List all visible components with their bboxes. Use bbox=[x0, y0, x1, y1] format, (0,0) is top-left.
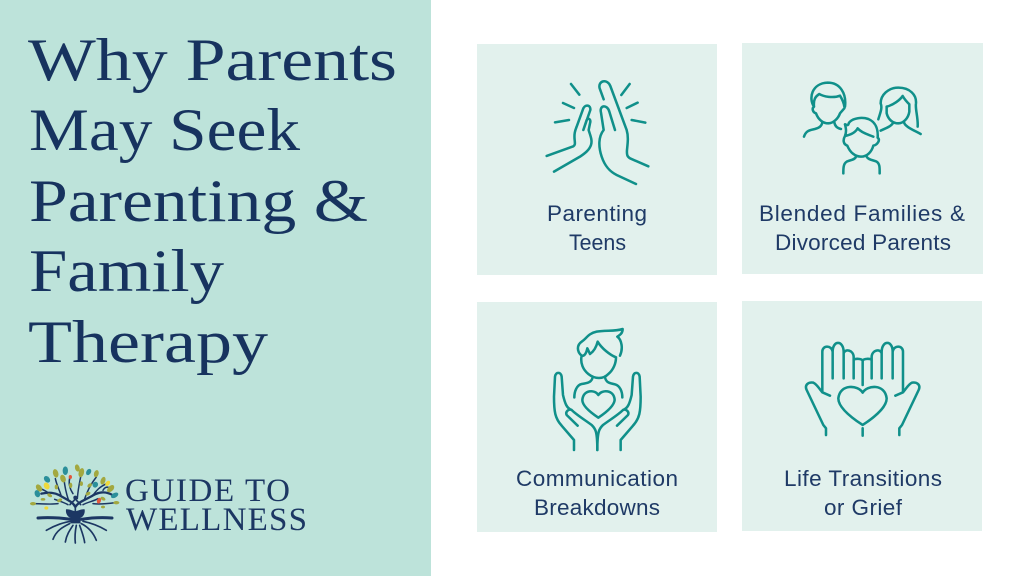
label: Communication Breakdowns: Breakdowns bbox=[534, 495, 660, 520]
logo wordmark: GUIDE TO bbox=[125, 473, 290, 509]
title: Why Parents bbox=[28, 27, 397, 93]
logo wordmark: WELLNESS bbox=[126, 502, 307, 538]
icon: wellness tree bbox=[30, 464, 119, 543]
logo wordmark bbox=[125, 473, 307, 538]
panel: Communication Breakdowns bbox=[477, 302, 717, 532]
label: Blended Families: Blended Families & bbox=[759, 201, 965, 226]
label: Life Transitions: or Grief bbox=[824, 495, 903, 520]
panel: title background bbox=[0, 0, 431, 576]
label: Parenting Teens: Teens bbox=[569, 230, 626, 255]
label: Communication Breakdowns bbox=[516, 466, 678, 520]
label: Blended Families bbox=[759, 201, 965, 255]
icon: high five bbox=[547, 81, 648, 184]
label: Parenting Teens: Parenting bbox=[547, 201, 647, 226]
panel: Parenting Teens bbox=[477, 44, 717, 275]
icon: child with heart in hands bbox=[554, 329, 641, 450]
label: Parenting Teens bbox=[547, 201, 647, 255]
title: Parenting & bbox=[29, 168, 368, 234]
label: Life Transitions bbox=[784, 466, 942, 520]
label: Life Transitions: Life Transitions bbox=[784, 466, 942, 491]
label: Blended Families: Divorced Parents bbox=[775, 230, 951, 255]
label: Communication Breakdowns: Communication bbox=[516, 466, 678, 491]
title: Family bbox=[29, 238, 224, 304]
logo: Guide to Wellness bbox=[30, 464, 307, 543]
title: Therapy bbox=[28, 309, 268, 375]
icon: heart in open hands bbox=[806, 343, 919, 436]
icon: family of three bbox=[804, 83, 921, 173]
title bbox=[28, 27, 397, 375]
panel: Blended Families bbox=[742, 43, 983, 274]
panel: Life Transitions bbox=[742, 301, 982, 531]
title: May Seek bbox=[29, 97, 300, 163]
